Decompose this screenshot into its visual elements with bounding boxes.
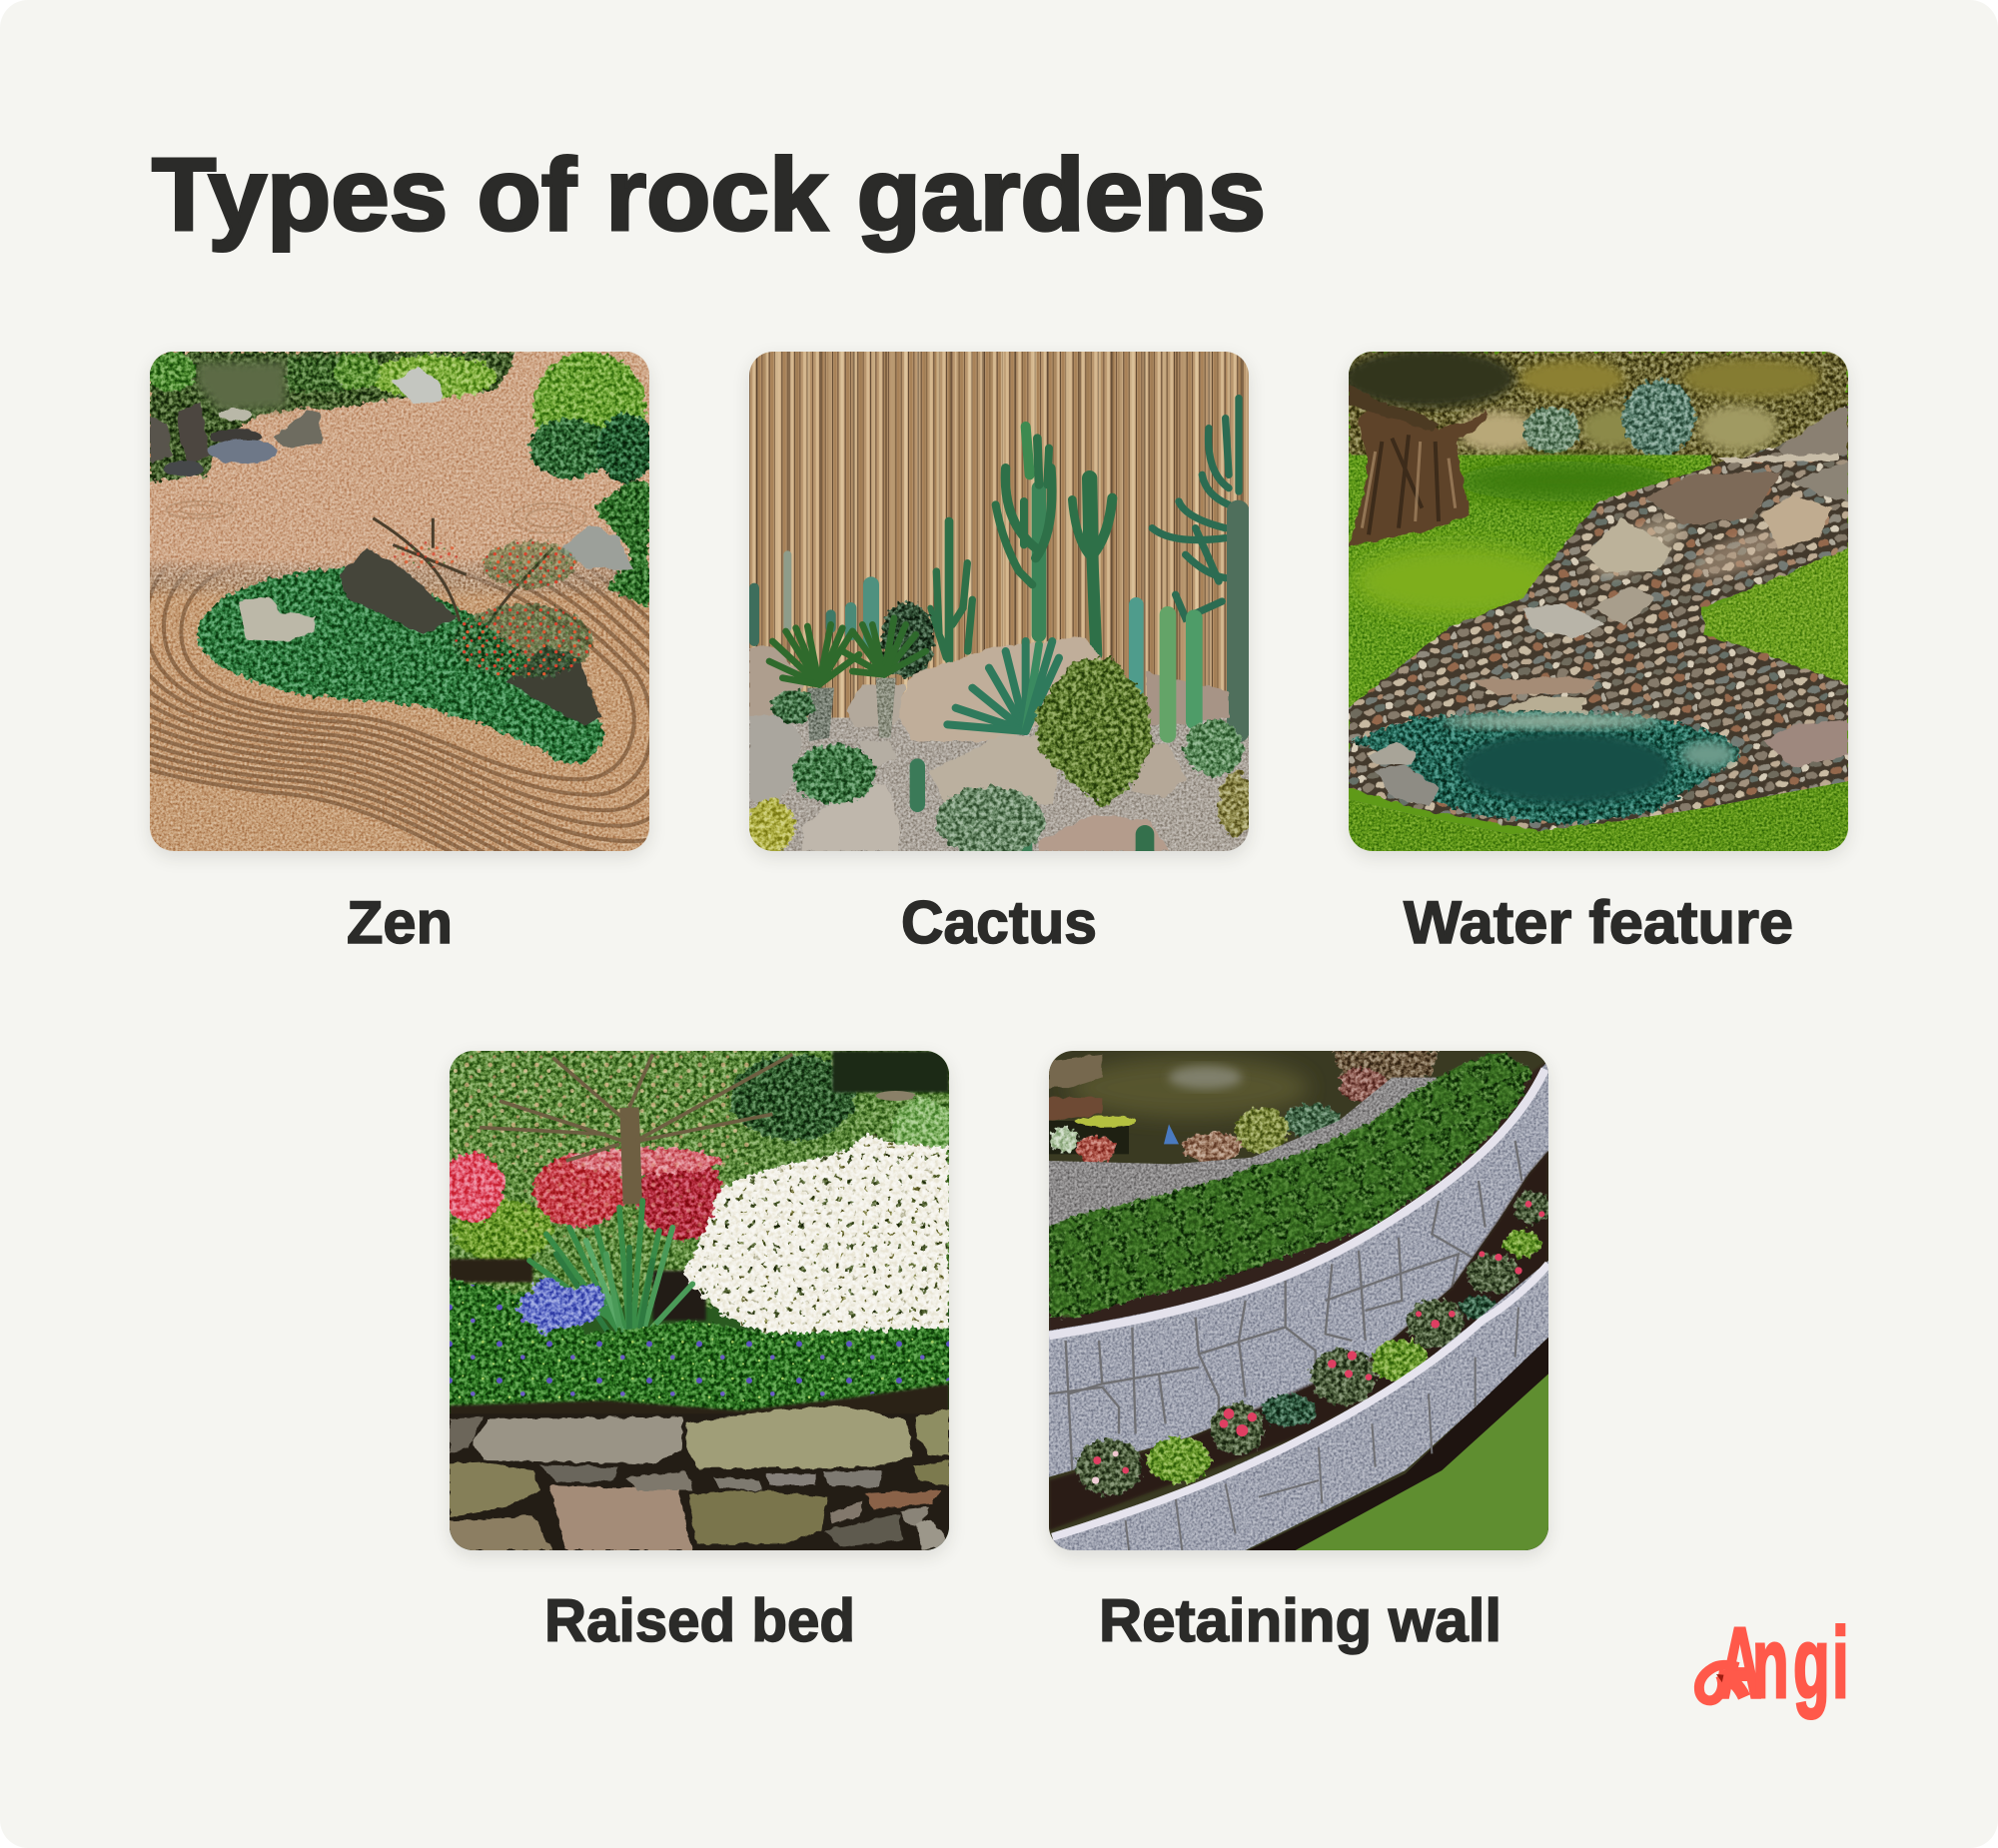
red azaleas <box>442 1148 726 1241</box>
photo: raised bed <box>450 1051 949 1550</box>
planter flowers <box>1076 1191 1550 1495</box>
blue hyacinths <box>517 1278 604 1336</box>
dry stone wall <box>450 1405 949 1550</box>
pond at top <box>1049 1051 1548 1550</box>
label: retaining wall: Retaining wall <box>1099 1587 1501 1654</box>
moss island <box>197 568 604 763</box>
sunlit rocks in upper creek <box>1585 505 1791 590</box>
label: raised bed: Raised bed <box>544 1587 855 1654</box>
soil behind wall <box>1049 1061 1548 1341</box>
bamboo fence <box>749 352 1249 718</box>
planter soil <box>1049 1151 1548 1530</box>
lawn <box>1249 1338 1548 1550</box>
white azalea <box>682 1134 949 1336</box>
photo: water feature <box>1349 352 1848 851</box>
large stream stones <box>1367 409 1848 768</box>
top foliage and pond <box>147 352 516 481</box>
dark shrub behind palms <box>881 601 934 678</box>
logo: Angi: Angi <box>1718 1607 1849 1719</box>
blue-green columns <box>917 604 1194 851</box>
label: zen: Zen <box>347 889 453 956</box>
olive shrub <box>1036 658 1152 808</box>
thuja hedge <box>1049 1053 1531 1318</box>
daffodil leaves <box>529 1201 692 1334</box>
rocks <box>749 636 1229 851</box>
red berry shrub <box>373 518 592 678</box>
dry creek pebbles <box>1349 405 1848 831</box>
raked sand <box>0 351 844 965</box>
lower stone wall <box>1052 1261 1548 1550</box>
photo: cactus garden <box>749 352 1249 851</box>
concrete path <box>1049 1078 1442 1228</box>
tall cacti <box>754 399 1239 731</box>
title: Types of rock gardens <box>152 137 1266 252</box>
label: cactus: Cactus <box>901 889 1097 956</box>
photo: retaining wall <box>1049 1051 1548 1550</box>
label: water feature: Water feature <box>1404 889 1793 956</box>
upper stone wall <box>1049 1061 1548 1477</box>
island stones <box>238 548 601 724</box>
photo: zen garden <box>150 352 649 851</box>
agave <box>947 641 1059 731</box>
pond side stones <box>1367 743 1439 806</box>
foreground lawn <box>1349 781 1848 851</box>
groundcover with violets <box>443 1278 952 1417</box>
gravel ground <box>749 718 1249 851</box>
tree trunk and branches <box>480 1054 792 1204</box>
right shrubs <box>529 352 654 608</box>
soil strip <box>450 1384 949 1420</box>
old tree trunk <box>1349 385 1487 546</box>
tree canopy backdrop <box>1342 349 1848 851</box>
pond <box>1352 711 1741 824</box>
background foliage <box>447 1048 952 1550</box>
left rocks <box>150 368 442 476</box>
cactus clusters <box>747 689 1252 856</box>
lawn <box>1349 455 1848 714</box>
palm cycads <box>769 618 926 741</box>
